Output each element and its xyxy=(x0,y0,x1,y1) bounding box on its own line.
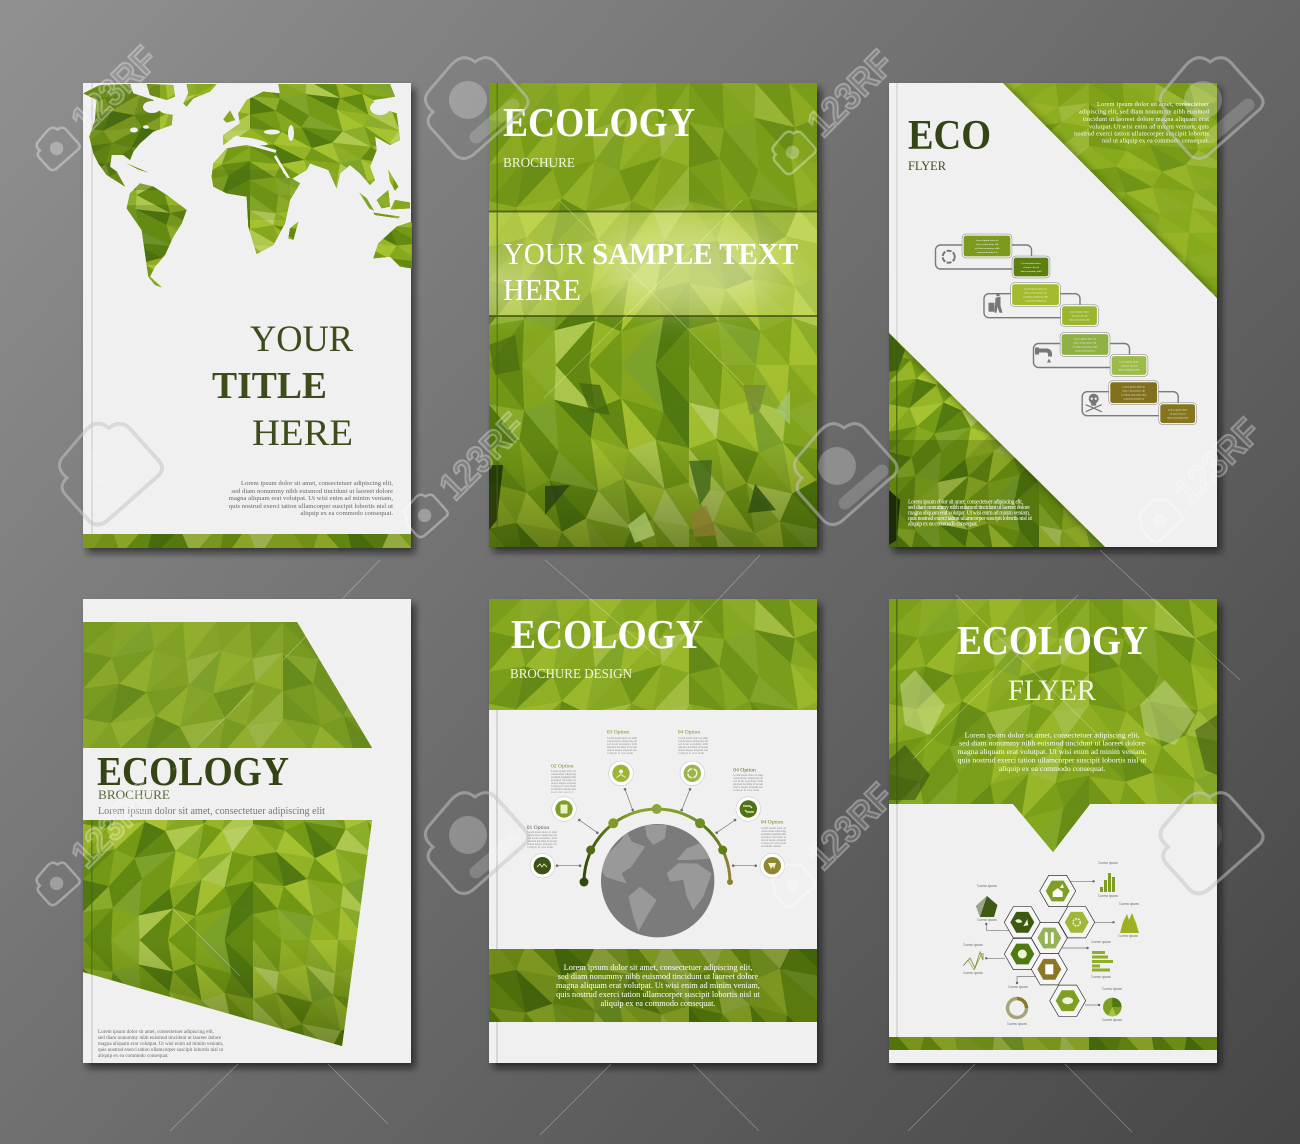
flow step 1: recycling: amet, consectetuer elit xyxy=(976,243,999,246)
cover 4: ecology brochure with angled shapes xyxy=(82,599,419,1072)
lower green band xyxy=(489,949,817,1022)
subtitle: brochure design: BROCHURE DESIGN xyxy=(510,667,632,682)
mini donut chart: Lorem ipsum xyxy=(1008,985,1028,989)
title: your title here: TITLE xyxy=(212,365,327,407)
footer paragraph: sed diam nonummy nibh euismod tincidunt ut laoreet dolore xyxy=(98,1035,222,1041)
title: ecology: ECOLOGY xyxy=(503,99,695,145)
watermark: 123RF mid right xyxy=(1118,405,1277,564)
timeline arc xyxy=(580,804,733,886)
flow step 2: waste: Lorem ipsum dolor xyxy=(1070,311,1089,314)
subtitle: flyer: FLYER xyxy=(1008,674,1096,707)
top paragraph: nisl ut aliquip ex ea commodo consequat. xyxy=(1102,138,1209,144)
paragraph: sed diam nonummy nibh euismod tincidunt ut laoreet dolore xyxy=(231,488,393,495)
watermark: 123RF top left: 123RF xyxy=(64,39,166,141)
option 04 recycle: 04 Option xyxy=(678,730,700,736)
title: your title here: HERE xyxy=(252,413,353,454)
flow step 4: toxic skull: Lorem ipsum dolor sit xyxy=(1123,386,1145,389)
dark facets xyxy=(579,383,610,415)
option 05: sed diam nonummy nibh xyxy=(733,780,764,783)
footer paragraph: aliquip ex ea commodo consequat. xyxy=(98,1053,169,1059)
paragraph xyxy=(229,480,393,517)
top paragraph xyxy=(1074,101,1210,144)
watermark: 123RF mid centre: 123RF xyxy=(432,406,534,508)
top paragraph: volutpat. Ut wisi enim ad minim veniam, quis xyxy=(1089,124,1210,130)
mini bar chart: Lorem ipsum xyxy=(1098,861,1118,865)
option 06: Lorem ipsum dolor sit xyxy=(761,827,786,830)
option 06: euismod tincidunt ut xyxy=(761,836,786,839)
subtitle: brochure: BROCHURE xyxy=(503,156,575,171)
watermark: 123RF top middle xyxy=(751,37,910,196)
flow step 2: waste xyxy=(984,284,1098,326)
title: eco: ECO xyxy=(908,113,991,159)
option 02: dolore magna aliquam xyxy=(551,782,577,785)
option 01: consectetuer adipiscing elit xyxy=(527,834,557,837)
paragraph: Lorem ipsum dolor sit amet, consectetuer adipiscing elit, xyxy=(241,480,393,487)
band paragraph: aliquip ex ea commodo consequat. xyxy=(601,999,715,1008)
bottom paragraph: sed diam nonummy nibh euismod tincidunt ut laoreet dolore xyxy=(908,505,1030,511)
band paragraph: quis nostrud exerci tation ullamcorper suscipit lobortis nisl ut xyxy=(556,990,761,999)
title: ecology: ECOLOGY xyxy=(97,748,289,794)
watermark: 123RF lower left xyxy=(15,768,174,927)
option 02: volutpat ut wisi enim xyxy=(551,785,577,788)
flow step 2: waste: euismod tincidunt ut xyxy=(1025,300,1046,303)
tagline: Lorem ipsum dolor sit amet, consectetuer adipiscing elit xyxy=(98,806,325,817)
band heading: YOUR SAMPLE TEXT xyxy=(503,236,798,271)
option 02: consectetuer adipiscing xyxy=(551,773,577,776)
option 02: sed diam nonummy nibh xyxy=(551,776,577,779)
subtitle: brochure: BROCHURE xyxy=(98,787,170,802)
top paragraph: nostrud exerci tation ullamcorper suscipit lobortis xyxy=(1074,130,1210,138)
top paragraph: tincidunt ut laoreet dolore magna aliquam erat xyxy=(1083,116,1209,123)
flow step 2: waste: Lorem ipsum dolor sit xyxy=(1024,288,1047,291)
paragraph: quis nostrud exerci tation ullamcorper suscipit lobortis nisl ut xyxy=(958,756,1147,764)
option 03: euismod tincidunt ut laoreet xyxy=(607,746,637,749)
option 06: dolore magna aliquam xyxy=(761,839,787,842)
mini pentagon chart xyxy=(976,884,998,922)
watermark: 123RF lower centre: 123RF xyxy=(800,776,902,878)
mini horizontal bars: Lorem ipsum xyxy=(1091,975,1111,979)
flow step 3: water tap: Lorem ipsum dolor sit xyxy=(1074,338,1096,340)
top paragraph: adipiscing elit, sed diam nonummy nibh euismod xyxy=(1079,108,1210,116)
watermark: 123RF top left xyxy=(15,33,174,192)
option 06 xyxy=(760,820,787,878)
option 05: 04 Option xyxy=(733,768,756,774)
mini horizontal bars xyxy=(1091,940,1113,979)
paragraph: Lorem ipsum dolor sit amet, consectetuer adipiscing elit, xyxy=(965,730,1139,740)
flow step 1: recycling: Lorem ipsum dolor xyxy=(1021,262,1041,265)
upper green shape xyxy=(83,622,372,748)
lower green shape xyxy=(83,820,372,1046)
mini line chart: Lorem ipsum xyxy=(963,943,983,947)
paragraph: sed diam nonummy nibh euismod tincidunt ut laoreet dolore xyxy=(959,738,1145,748)
mini pie chart xyxy=(1102,987,1122,1022)
flow step 1: recycling: euismod tincidunt ut xyxy=(977,251,998,254)
bottom paragraph: magna aliquam erat volutpat. Ut wisi enim ad minim veniam, xyxy=(908,510,1031,516)
green header with notch xyxy=(889,599,1217,852)
option 04 recycle: consectetuer adipiscing elit xyxy=(678,740,708,743)
flow step 1: recycling: diam nonummy nibh xyxy=(1021,270,1042,273)
top right green triangle xyxy=(1003,83,1217,298)
watermark: 123RF mid right: 123RF xyxy=(1167,411,1269,513)
option 05: Lorem ipsum dolor sit amet xyxy=(733,774,763,777)
top green band xyxy=(489,599,817,710)
paragraph xyxy=(958,730,1147,773)
option 02: 02 Option xyxy=(551,764,574,770)
flow step 4: toxic skull: euismod tincidunt ut xyxy=(1123,398,1144,401)
paragraph: aliquip ex ea commodo consequat. xyxy=(300,510,393,517)
flow step 3: water tap: Lorem ipsum dolor xyxy=(1119,360,1139,364)
bottom strip xyxy=(83,534,411,548)
mini donut chart: Lorem ipsum xyxy=(1007,1022,1027,1026)
mini bar chart: Lorem ipsum xyxy=(1098,894,1118,898)
option 06: consectetuer adipiscing xyxy=(761,830,787,833)
option 06: volutpat ut wisi enim xyxy=(761,842,787,845)
option 02: nostrud exerci xyxy=(551,791,573,794)
option 03: consectetuer adipiscing elit xyxy=(607,740,637,743)
option 04 recycle: Lorem ipsum dolor sit amet xyxy=(678,737,708,740)
option 01: dolore magna aliquam erat xyxy=(527,843,557,846)
option 03: dolore magna aliquam erat xyxy=(607,749,637,752)
flow step 3: water tap: euismod tincidunt ut xyxy=(1075,350,1096,352)
band paragraph: Lorem ipsum dolor sit amet, consectetuer adipiscing elit, xyxy=(564,963,752,972)
paragraph: aliquip ex ea commodo consequat. xyxy=(999,764,1105,773)
top paragraph: Lorem ipsum dolor sit amet, consectetuer xyxy=(1097,101,1210,108)
flow step 3: water tap: sed diam nonummy nibh xyxy=(1073,346,1098,348)
band paragraph: sed diam nonummy nibh euismod tincidunt ut laoreet dolore xyxy=(558,972,759,981)
watermark: 123RF mid centre xyxy=(383,400,542,559)
flow step 3: water tap: amet, consectetuer elit xyxy=(1074,342,1097,344)
mini donut chart xyxy=(1007,985,1028,1026)
option 02: ad minim veniam quis xyxy=(551,788,576,791)
flow step 1: recycling: sit amet elit sed xyxy=(1023,266,1040,269)
flow step 2: waste: diam nonummy nibh xyxy=(1069,319,1091,322)
option 05 xyxy=(733,768,764,821)
option 05: euismod tincidunt ut laoreet xyxy=(733,783,763,786)
bottom paragraph: Lorem ipsum dolor sit amet, consectetuer adipiscing elit, xyxy=(908,500,1024,506)
option 01: sed diam nonummy nibh xyxy=(527,837,558,840)
hexagon cluster xyxy=(985,875,1115,1016)
band paragraph: magna aliquam erat volutpat. Ut wisi enim ad minim veniam, xyxy=(556,981,760,990)
subtitle: flyer: FLYER xyxy=(908,158,946,173)
title: ecology: ECOLOGY xyxy=(957,617,1148,663)
option 03: sed diam nonummy nibh xyxy=(607,743,638,746)
cover 1: world map title sheet xyxy=(82,83,419,557)
flow step 4: toxic skull: Lorem ipsum dolor xyxy=(1168,409,1188,412)
footer paragraph: quis nostrud exerci tation ullamcorper suscipit lobortis nisl ut xyxy=(98,1047,224,1053)
bottom strip xyxy=(889,1037,1217,1050)
flow step 4: toxic skull: diam nonummy nibh xyxy=(1167,417,1189,420)
mini area chart: Lorem ipsum xyxy=(1119,902,1139,906)
watermark: 123RF lower centre xyxy=(751,770,910,929)
option 01 xyxy=(527,825,558,878)
cover 2: ecology brochure xyxy=(488,83,825,556)
bottom paragraph: aliquip ex ea commodo consequat. xyxy=(908,522,979,528)
mini pentagon chart: Lorem ipsum xyxy=(977,884,997,888)
title: your title here xyxy=(212,319,353,454)
mini pie chart: Lorem ipsum xyxy=(1102,1018,1122,1022)
footer paragraph: magna aliquam erat volutpat. Ut wisi enim ad minim veniam, xyxy=(98,1041,223,1047)
option 01: Lorem ipsum dolor sit amet xyxy=(527,831,557,834)
option 02 xyxy=(551,764,577,821)
flow step 1: recycling xyxy=(936,235,1049,277)
bottom left green triangle xyxy=(889,333,1105,547)
flow step 2: waste: amet, consectetuer elit xyxy=(1024,292,1047,295)
option 04 recycle: dolore magna aliquam erat xyxy=(678,749,708,752)
flow step 4: toxic skull: sit amet elit sed xyxy=(1170,413,1186,416)
mini area chart: Lorem ipsum xyxy=(1118,934,1138,938)
option 04 recycle: euismod tincidunt ut laoreet xyxy=(678,746,708,749)
faint diagonal watermark lines xyxy=(170,200,1240,1135)
option 01: euismod tincidunt ut laoreet xyxy=(527,840,557,843)
option 01: 01 Option xyxy=(527,825,549,831)
option 01: volutpat ut wisi enim xyxy=(527,846,554,849)
option 04 recycle: volutpat ut wisi enim xyxy=(678,752,705,755)
map inland seas xyxy=(130,101,390,178)
band heading xyxy=(503,236,798,307)
title: your title here: YOUR xyxy=(250,319,353,360)
mini bar chart xyxy=(1098,861,1118,898)
option 06: ad minim veniam xyxy=(761,845,782,848)
option 06: 04 Option xyxy=(761,820,783,826)
option 05: consectetuer adipiscing elit xyxy=(733,777,763,780)
mini pentagon chart: Lorem ipsum xyxy=(977,918,997,922)
mini horizontal bars: Lorem ipsum xyxy=(1091,940,1111,944)
watermark: large stamps xyxy=(59,58,1263,894)
band heading: HERE xyxy=(503,272,581,307)
paragraph: magna aliquam erat volutpat. Ut wisi enim ad minim veniam, xyxy=(229,495,393,502)
option 03 xyxy=(607,730,638,786)
connector arrows xyxy=(556,788,757,867)
globe xyxy=(600,824,715,937)
footer paragraph: Lorem ipsum dolor sit amet, consectetuer adipiscing elit, xyxy=(98,1029,214,1035)
mini pie chart: Lorem ipsum xyxy=(1102,987,1122,991)
option 03: volutpat ut wisi enim xyxy=(607,752,634,755)
cover 5: ecology brochure design xyxy=(489,599,825,1072)
flow step 3: water tap: sit amet elit sed xyxy=(1121,364,1138,368)
paragraph: quis nostrud exerci tation ullamcorper suscipit lobortis nisl ut xyxy=(229,503,393,510)
bottom paragraph: quis nostrud exerci tation ullamcorper suscipit lobortis nisl ut xyxy=(908,516,1032,522)
watermark: 123RF top middle: 123RF xyxy=(800,43,902,145)
flow step 1: recycling: sed diam nonummy nibh xyxy=(975,247,1000,250)
option 02: euismod tincidunt ut xyxy=(551,779,576,782)
option 03: Lorem ipsum dolor sit amet xyxy=(607,737,637,740)
watermark: 123RF lower left: 123RF xyxy=(64,774,166,876)
mini area chart xyxy=(1118,902,1139,938)
band paragraph xyxy=(556,963,761,1008)
option 06: sed diam nonummy nibh xyxy=(761,833,787,836)
flow step 2: waste: sed diam nonummy nibh xyxy=(1023,296,1049,299)
bottom paragraph xyxy=(908,500,1032,528)
option 02: Lorem ipsum dolor sit xyxy=(551,770,576,773)
option 05: volutpat ut wisi enim xyxy=(733,789,760,792)
title: ecology: ECOLOGY xyxy=(511,611,703,657)
paragraph: magna aliquam erat volutpat. Ut wisi enim ad minim veniam, xyxy=(958,747,1147,756)
mini line chart: Lorem ipsum xyxy=(963,971,983,975)
flow step 4: toxic skull: amet, consectetuer elit xyxy=(1122,390,1145,393)
option 04 recycle xyxy=(678,730,709,786)
cover 6: ecology flyer xyxy=(889,599,1224,1072)
flow step 3: water tap xyxy=(1034,334,1147,376)
option 05: dolore magna aliquam erat xyxy=(733,786,763,789)
option 04 recycle: sed diam nonummy nibh xyxy=(678,743,709,746)
flow step 2: waste: sit amet elit sed xyxy=(1072,315,1088,318)
flow step 3: water tap: diam nonummy nibh xyxy=(1119,368,1140,372)
flow step 4: toxic skull: sed diam nonummy nibh xyxy=(1121,394,1147,397)
cover 3: eco flyer xyxy=(889,83,1225,556)
footer paragraph xyxy=(98,1029,224,1059)
flow step 1: recycling: Lorem ipsum dolor sit xyxy=(976,239,998,242)
world map xyxy=(83,84,412,288)
flow step 4: toxic skull xyxy=(1082,382,1196,424)
option 03: 03 Option xyxy=(607,730,629,736)
mini line chart xyxy=(963,943,983,975)
